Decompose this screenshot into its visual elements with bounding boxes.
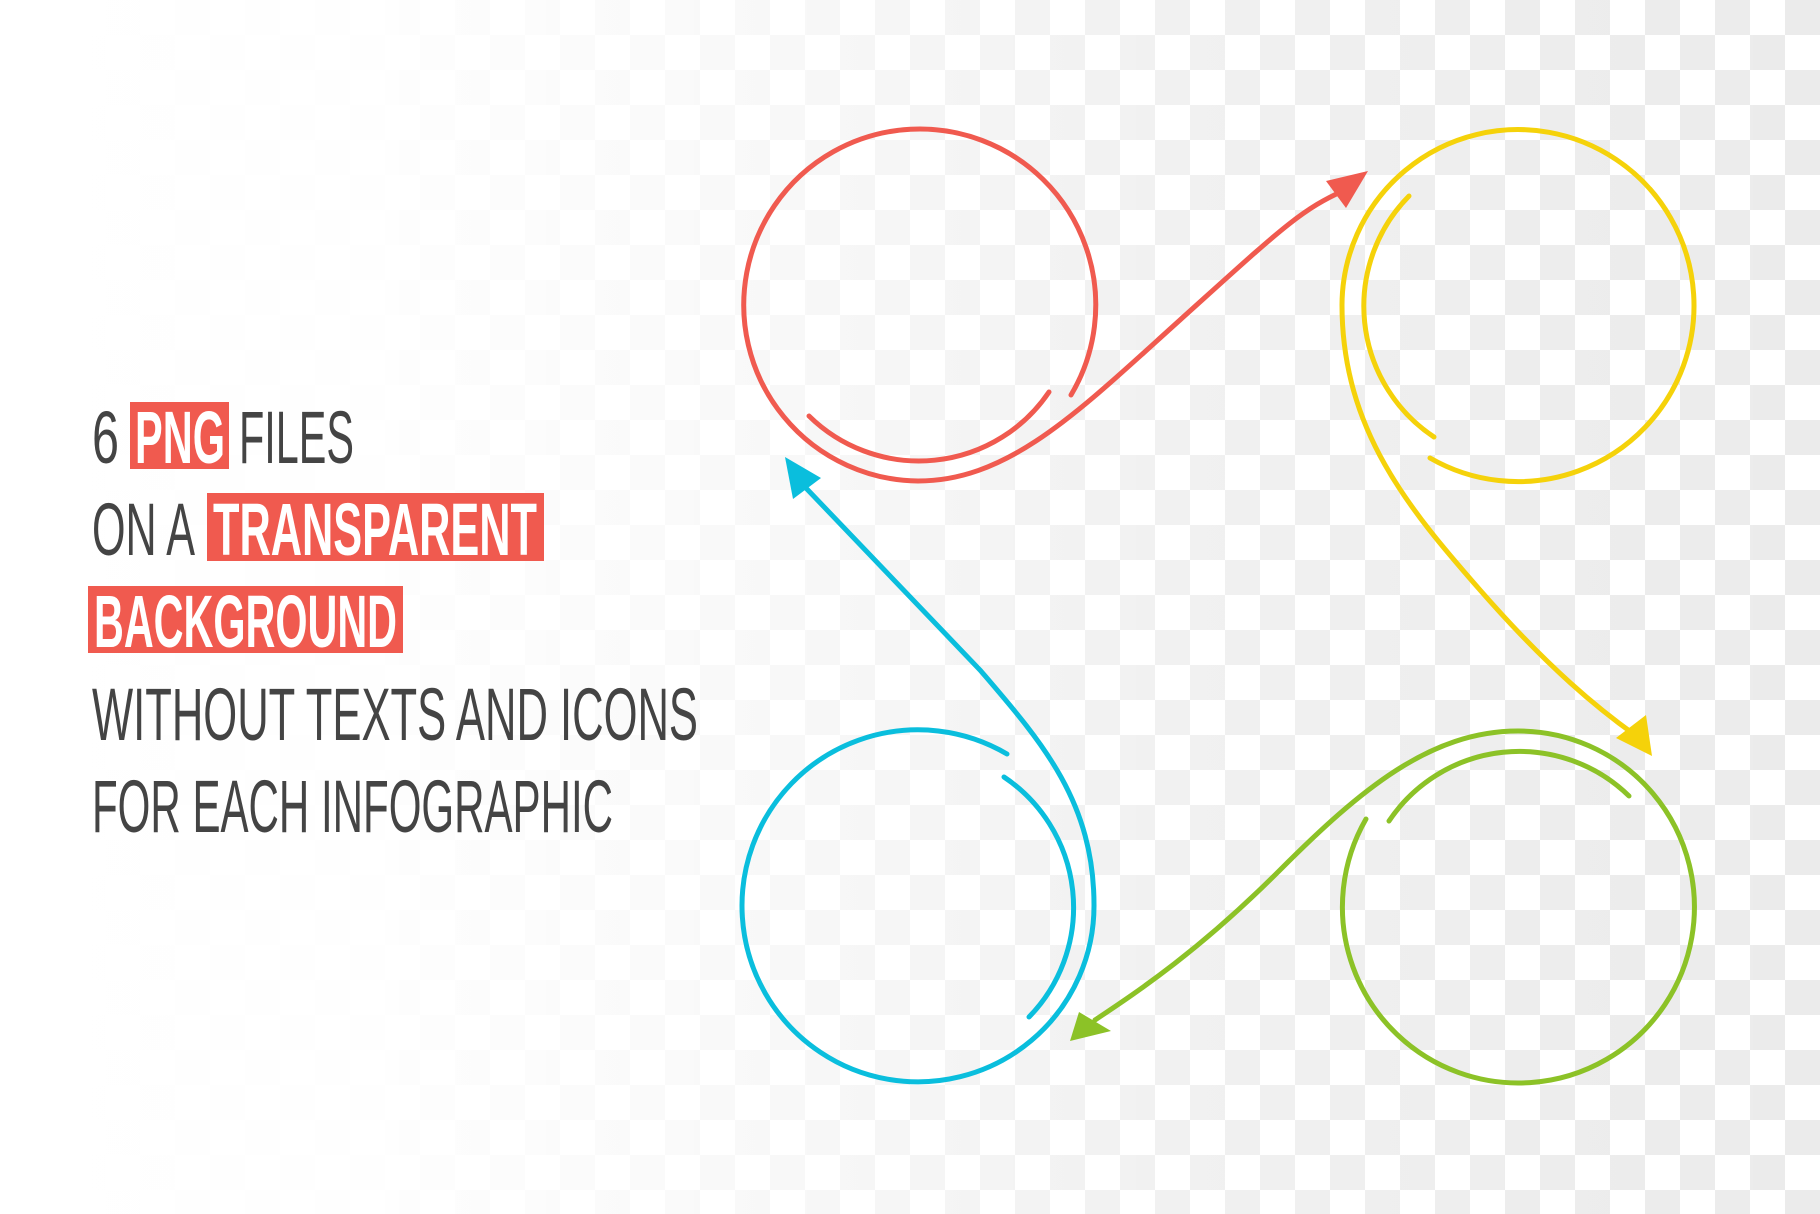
text block: headline: PNG (135, 396, 225, 479)
blue circle with arrow (742, 457, 1094, 1082)
text block: headline: FOR EACH INFOGRAPHIC (92, 765, 613, 848)
text block: headline: 6 (92, 396, 119, 479)
text block: headline: BACKGROUND (94, 580, 397, 663)
text block: headline (88, 396, 698, 848)
yellow circle with arrow (1342, 130, 1694, 756)
text block: headline: ON A (92, 488, 195, 571)
text block: headline: TRANSPARENT (213, 488, 537, 571)
text block: headline: FILES (239, 396, 354, 479)
green circle with arrow (1070, 731, 1694, 1083)
red circle with arrow (744, 129, 1368, 481)
text block: headline: WITHOUT TEXTS AND ICONS (92, 673, 698, 756)
